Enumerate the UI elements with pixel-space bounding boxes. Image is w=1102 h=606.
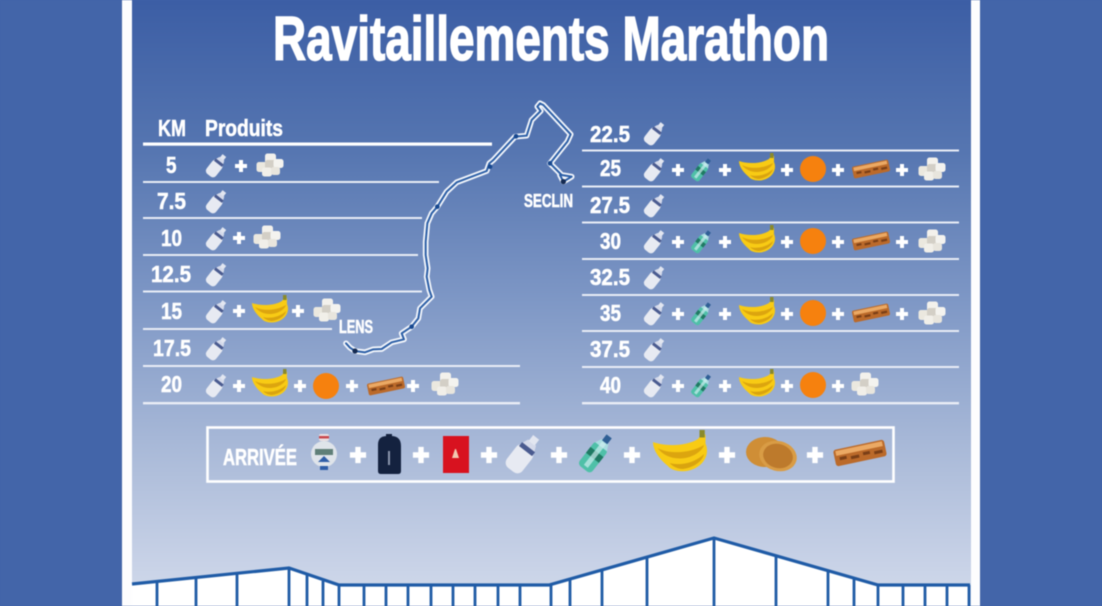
row: km 37.5 <box>582 336 959 368</box>
row: km 5 <box>143 152 439 183</box>
finish label: ARRIVÉE <box>223 443 297 470</box>
row: km 32.5 <box>582 264 959 296</box>
row: km 37.5: 37.5 <box>590 336 630 362</box>
row: km 10: 10 <box>161 225 182 251</box>
row: km 27.5: 27.5 <box>590 192 630 218</box>
row: km 20 <box>143 369 520 404</box>
icon: backpack <box>378 434 401 474</box>
row: km 30: 30 <box>600 228 621 254</box>
icon: cereal bar <box>833 439 887 467</box>
icon: water bottle, large <box>577 431 616 474</box>
gradient panel <box>132 0 971 606</box>
row: km 17.5: 17.5 <box>153 335 191 361</box>
table: left column <box>143 115 520 404</box>
icon: bananas <box>653 430 707 471</box>
elevation profile <box>132 538 970 606</box>
row: km 25 <box>582 153 959 188</box>
white poster frame <box>122 0 980 606</box>
table header: KM <box>158 115 186 141</box>
row: km 12.5: 12.5 <box>151 261 191 287</box>
row: km 15 <box>143 295 340 330</box>
row: km 12.5 <box>143 261 422 292</box>
icon: water bottle, small <box>503 431 544 476</box>
icon: red booklet <box>443 436 469 473</box>
icon: medal <box>311 434 337 470</box>
route line <box>346 103 572 354</box>
row: km 15: 15 <box>161 298 182 324</box>
table header: Produits <box>205 115 283 141</box>
row: km 30 <box>582 225 959 260</box>
row: km 27.5 <box>582 192 959 224</box>
panel: finish line rewards <box>208 428 894 482</box>
row: km 40: 40 <box>600 372 621 398</box>
row: km 22.5: 22.5 <box>590 121 630 147</box>
row: km 7.5: 7.5 <box>157 188 186 214</box>
label: Seclin: SECLIN <box>524 191 573 211</box>
row: km 35 <box>582 297 959 332</box>
title: Ravitaillements Marathon <box>273 5 829 74</box>
row: km 25: 25 <box>600 155 621 181</box>
row: km 40 <box>582 369 959 404</box>
row: km 7.5 <box>143 188 422 219</box>
row: km 22.5 <box>582 120 959 152</box>
label: Lens: LENS <box>339 317 373 337</box>
row: km 5: 5 <box>166 152 177 178</box>
table header <box>143 115 492 146</box>
route map <box>339 103 573 354</box>
table: right column <box>582 120 959 404</box>
row: km 10 <box>143 225 418 256</box>
row: km 32.5: 32.5 <box>590 264 630 290</box>
row: km 20: 20 <box>161 371 182 397</box>
row: km 35: 35 <box>600 300 621 326</box>
row: km 17.5 <box>143 335 520 367</box>
icon: pancakes <box>746 437 800 475</box>
